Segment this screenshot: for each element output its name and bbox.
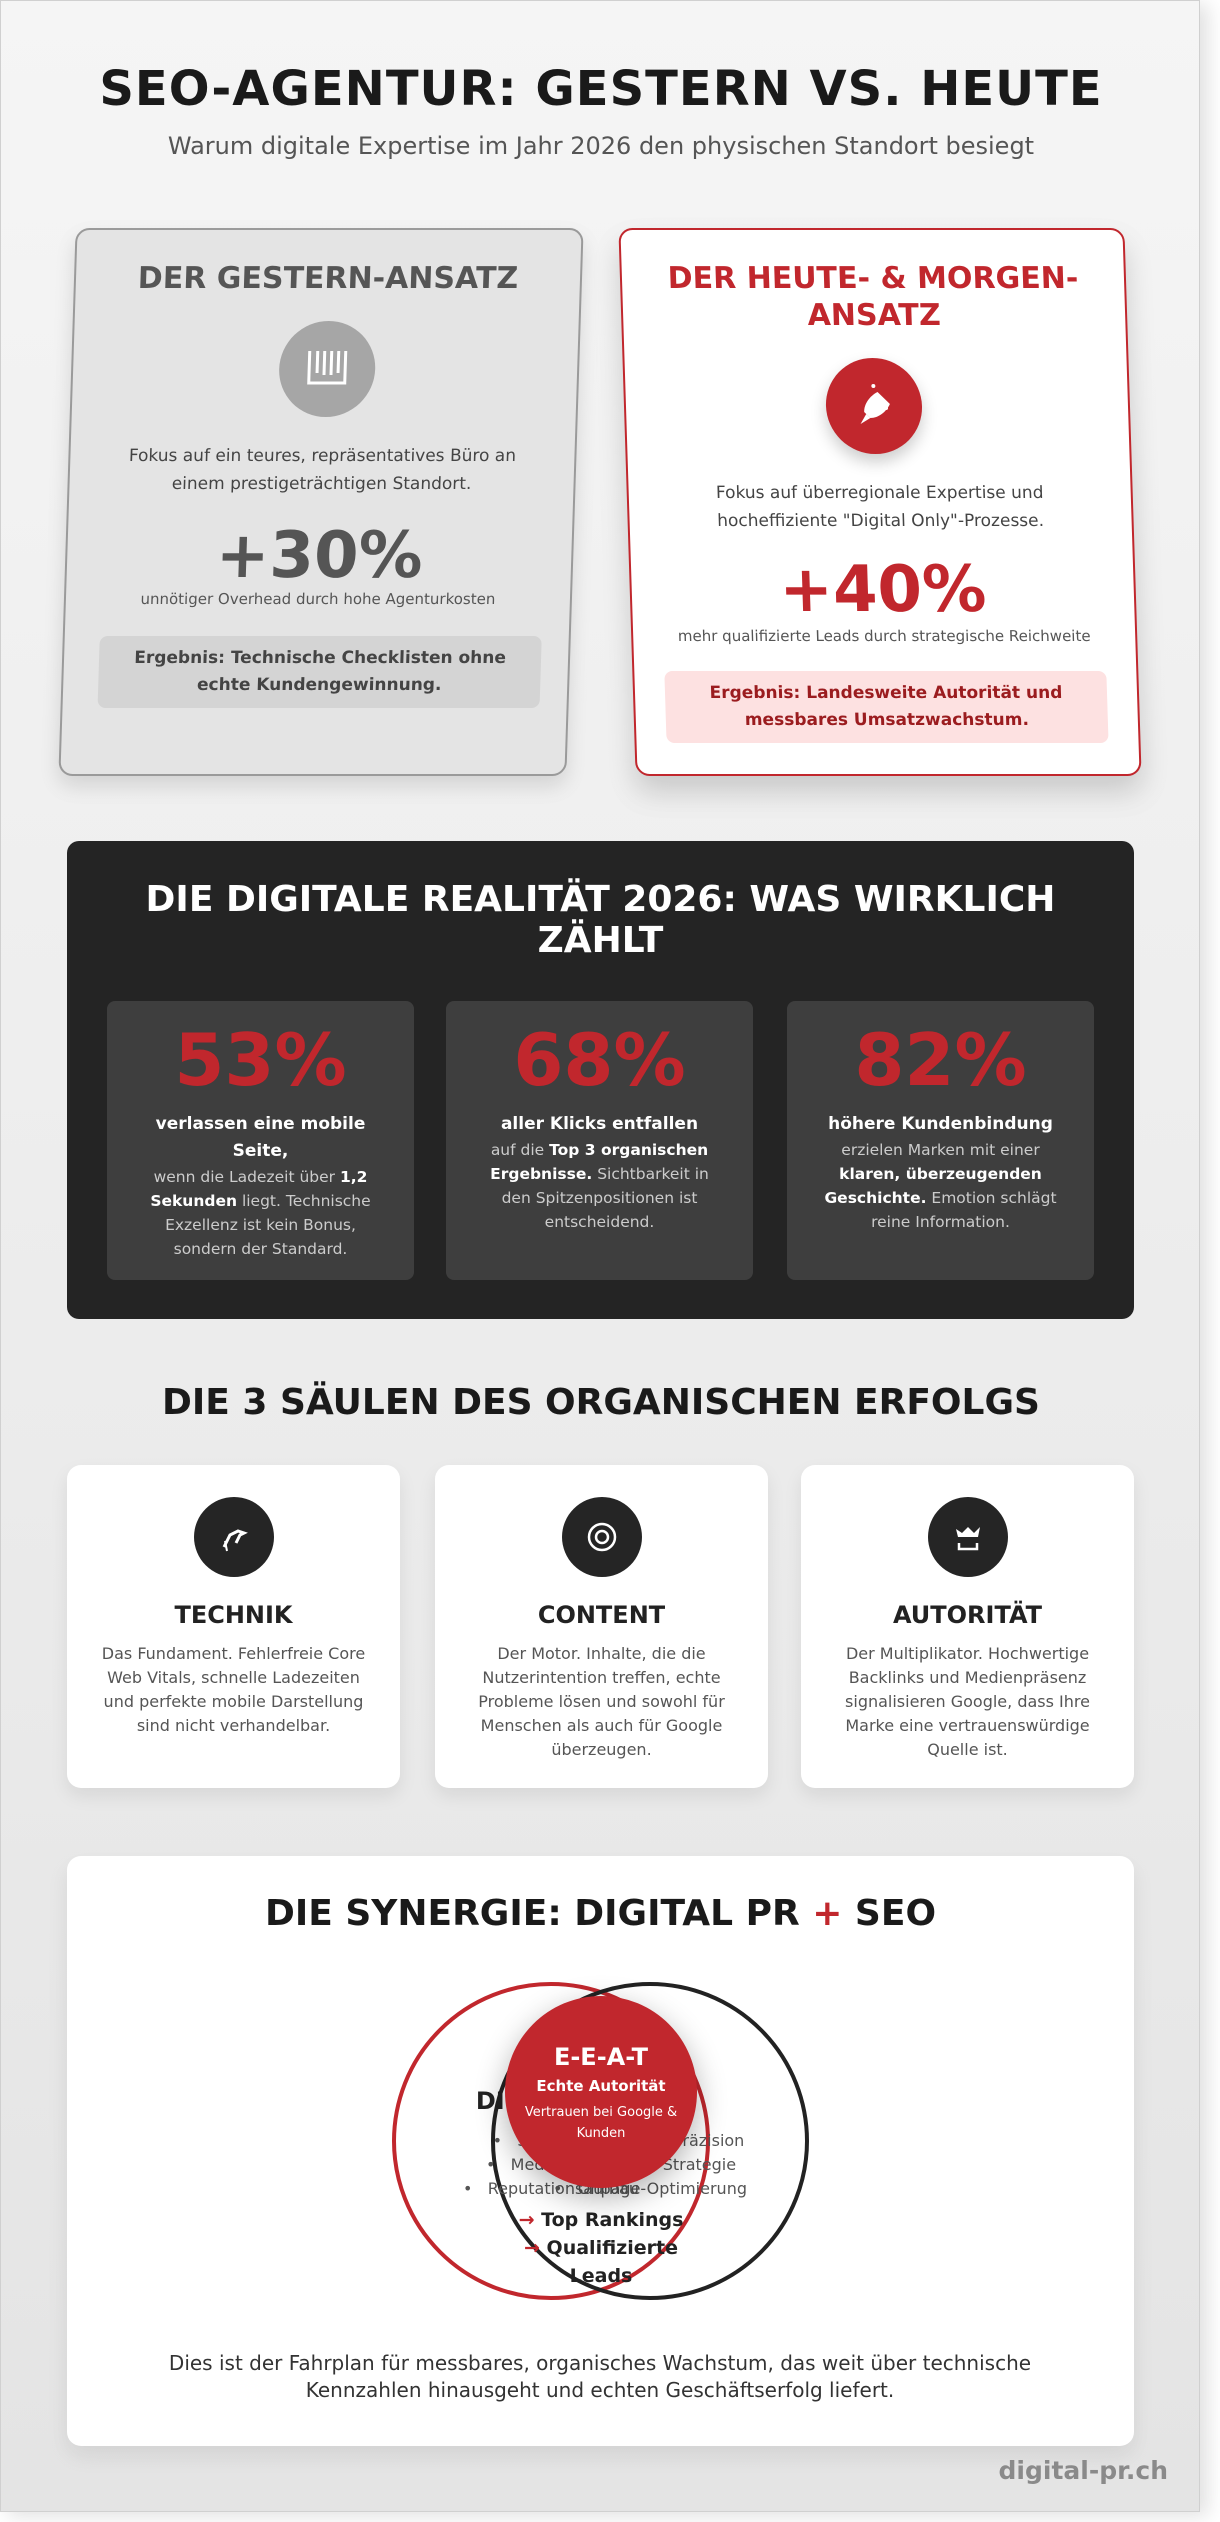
text: outcomes: → Top Rankings [519, 2209, 683, 2231]
heading: gestern: DER GESTERN-ANSATZ [137, 261, 519, 296]
panel: heute [618, 228, 1142, 776]
icon: target [562, 1497, 642, 1577]
text: conclusion: Dies ist der Fahrplan für messbares, organisches Wachstum, das weit über technische Kennzahlen hinausgeht und echten Geschäftserfolg liefert. [169, 2351, 1031, 2402]
pillar: autorität: Der Multiplikator. Hochwertige Backlinks und Medienpräsenz signalisieren Google, dass Ihre Marke eine vertrauenswürdige Quelle ist. [845, 1644, 1090, 1759]
text: gestern description: Fokus auf ein teures, repräsentatives Büro an einem prestigeträchtigen Standort. [129, 446, 516, 494]
circle: digital pr [392, 1982, 710, 2300]
caption: mehr qualifizierte Leads durch strategische Reichweite [678, 627, 1091, 645]
text: digital pr list [463, 2087, 639, 2198]
heading: digitale realität: DIE DIGITALE REALITÄT 2026: WAS WIRKLICH [146, 879, 1055, 920]
stat card: 82%: höhere Kundenbindung [828, 1114, 1053, 1134]
stat card: 68% [446, 1001, 753, 1280]
text: heute description: Fokus auf überregionale Expertise und hocheffiziente "Digital Only"-Prozesse. [716, 483, 1044, 531]
stat card: 68%: aller Klicks entfallen [501, 1114, 698, 1134]
text: seo list: • Technische Präzision [556, 2131, 744, 2150]
text: digital pr list: • Storytelling [493, 2131, 609, 2150]
text: digital pr list: • Reputationsaufbau [463, 2179, 639, 2198]
stat card: 68%: auf die Top 3 organischen Ergebnisse. Sichtbarkeit in den Spitzenpositionen ist entscheidend. [490, 1141, 709, 1231]
icon: crown [928, 1497, 1008, 1577]
stat card: 82%: erzielen Marken mit einer klaren, überzeugenden Geschichte. Emotion schlägt reine Information. [824, 1141, 1057, 1231]
circle: seo [491, 1982, 809, 2300]
heading: 3 säulen: DIE 3 SÄULEN DES ORGANISCHEN ERFOLGS [162, 1382, 1040, 1423]
icon: building [278, 321, 377, 417]
text: seo list [553, 2087, 747, 2198]
pillar: technik: Das Fundament. Fehlerfreie Core Web Vitals, schnelle Ladezeiten und perfekte mobile Darstellung sind nicht verhandelbar. [102, 1644, 365, 1735]
text: seo list: • Keyword-Strategie [564, 2155, 736, 2174]
panel: synergie [67, 1856, 1134, 2446]
pillar: technik [67, 1465, 400, 1788]
circle: e-e-a-t: E-E-A-T [554, 2043, 648, 2071]
heading: synergie: DIE SYNERGIE: DIGITAL PR + SEO [265, 1893, 936, 1934]
subtitle: Warum digitale Expertise im Jahr 2026 den physischen Standort besiegt [168, 132, 1034, 160]
stat card: 82%: 82% [854, 1018, 1027, 1102]
stat: +30%: +30% [215, 519, 424, 593]
text: seo list: • Onpage-Optimierung [553, 2179, 747, 2198]
circle: e-e-a-t [505, 1996, 697, 2188]
heading: heute: ANSATZ [807, 298, 941, 333]
text: outcomes [519, 2209, 683, 2287]
title: SEO-AGENTUR: GESTERN VS. HEUTE [99, 61, 1103, 117]
pillar: autorität [801, 1465, 1134, 1788]
heading: digitale realität: ZÄHLT [538, 920, 663, 961]
stat card: 82% [787, 1001, 1094, 1280]
result box: heute: Ergebnis: Landesweite Autorität und messbares Umsatzwachstum. [709, 683, 1063, 730]
footer: brand: digital-pr.ch [999, 2456, 1168, 2485]
stat card: 53%: 53% [174, 1018, 347, 1102]
pillar: content [435, 1465, 768, 1788]
stat card: 53%: wenn die Ladezeit über 1,2 Sekunden liegt. Technische Exzellenz ist kein Bonus, sondern der Standard. [150, 1168, 371, 1258]
pillar: autorität: AUTORITÄT [893, 1601, 1042, 1629]
text: digital pr list: • Medienarbeit [486, 2155, 616, 2174]
stat card: 68%: 68% [513, 1018, 686, 1102]
heading: heute: DER HEUTE- & MORGEN- [667, 261, 1079, 296]
text: seo list: SEO [623, 2087, 677, 2115]
result box: gestern: Ergebnis: Technische Checklisten ohne echte Kundengewinnung. [134, 648, 506, 695]
heading: heute [667, 261, 1079, 333]
heading: digitale realität [146, 878, 1055, 961]
circle: e-e-a-t: Vertrauen bei Google & Kunden [525, 2105, 677, 2141]
caption: unnötiger Overhead durch hohe Agenturkosten [140, 590, 496, 608]
stat card: 53%: verlassen eine mobile Seite, [156, 1114, 365, 1161]
text: outcomes: → Qualifizierte Leads [524, 2237, 678, 2287]
circle: e-e-a-t: Echte Autorität [536, 2077, 666, 2095]
panel: gestern [58, 228, 584, 776]
pillar: content: CONTENT [538, 1601, 665, 1629]
panel: digitale realität [67, 841, 1134, 1319]
result box: heute [664, 671, 1109, 743]
stat: +40%: +40% [778, 553, 987, 627]
pillar: content: Der Motor. Inhalte, die die Nutzerintention treffen, echte Probleme lösen und sowohl für Menschen als auch für Google überzeugen. [478, 1644, 725, 1759]
pillar: technik: TECHNIK [174, 1601, 293, 1629]
text: digital pr list: DIGITAL PR [476, 2087, 626, 2115]
icon: tools [194, 1497, 274, 1577]
venn diagram [392, 1982, 809, 2300]
icon: rocket [824, 358, 923, 454]
stat card: 53% [107, 1001, 414, 1280]
result box: gestern [98, 636, 542, 708]
